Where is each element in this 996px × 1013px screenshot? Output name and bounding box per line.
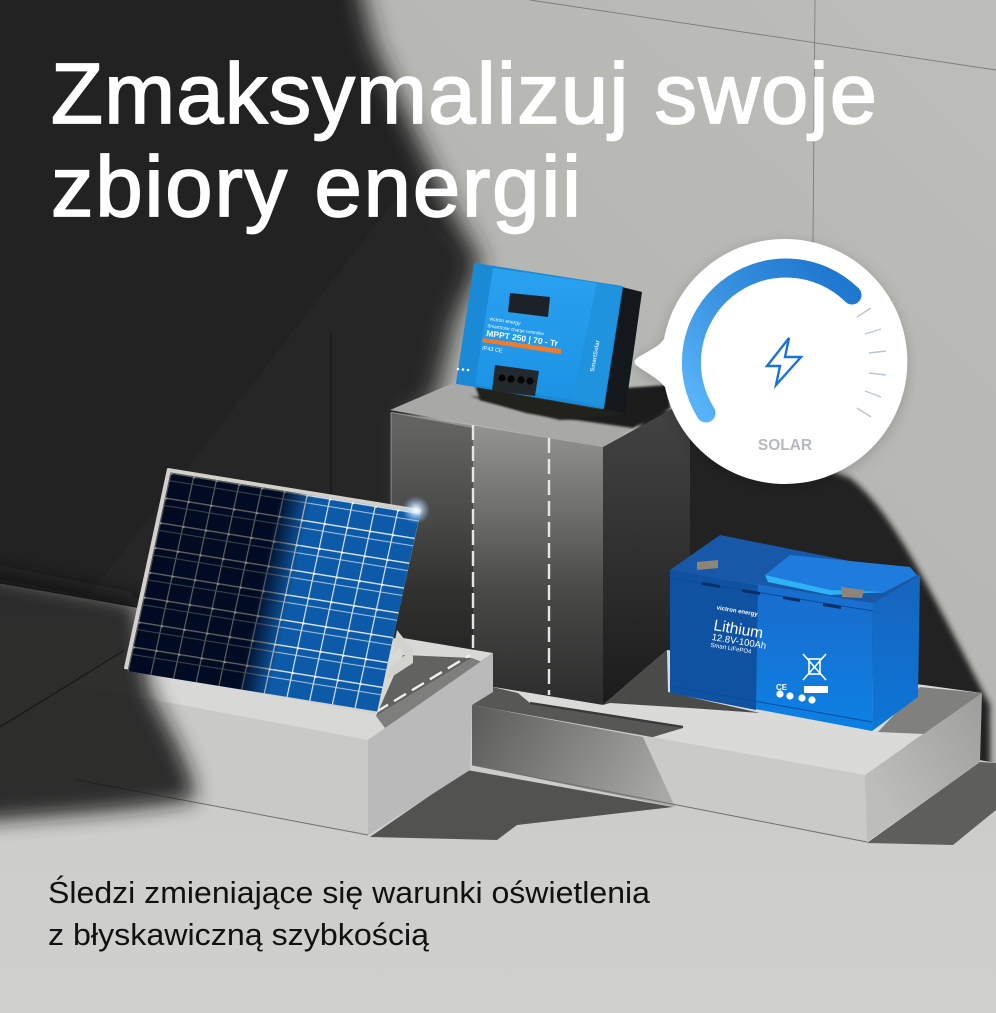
battery rim (670, 578, 873, 722)
recycling icon (803, 654, 826, 680)
battery markings (776, 683, 828, 704)
title: zbiory energii (51, 140, 581, 235)
battery lid (765, 555, 917, 593)
battery side (872, 575, 920, 731)
plinth top (390, 380, 633, 447)
solar panel (125, 469, 430, 713)
right plinth front (472, 705, 867, 842)
panel glint (402, 496, 430, 524)
controller body (457, 264, 622, 408)
plinth top shade (470, 385, 670, 428)
icon: lightning bolt (767, 338, 801, 385)
left plinth (74, 638, 493, 835)
battery labels: Lithium (712, 617, 764, 642)
left plinth side (368, 653, 493, 835)
plinth side (603, 400, 690, 705)
wall shadow: behind battery (640, 400, 990, 790)
controller labels: IP43 CE (482, 346, 503, 355)
controller right edge (573, 283, 622, 408)
right plinth (472, 650, 982, 842)
battery shaded front (670, 570, 758, 710)
controller labels: MPPT 250 | 70 - Tr (486, 328, 559, 349)
big soft shadow: lower left (0, 560, 195, 825)
orange stripe (482, 338, 561, 354)
callout bubble (634, 239, 907, 484)
centre plinth (390, 380, 690, 705)
battery top (670, 535, 920, 603)
right plinth top (472, 650, 982, 775)
controller port cover (508, 293, 550, 317)
gauge label: SOLAR (758, 437, 812, 454)
controller side label: SmartSolar (590, 339, 602, 372)
gauge arc (691, 268, 852, 413)
battery front (670, 570, 873, 731)
panel stand (387, 630, 413, 680)
battery terminals (697, 560, 864, 598)
plinth front (391, 412, 603, 705)
shadow below controller (475, 385, 620, 420)
wall shadow: left (0, 0, 482, 640)
gauge ticks (857, 308, 886, 417)
title (51, 47, 877, 235)
floor (0, 583, 996, 1013)
mounting plate (600, 287, 642, 413)
left plinth shade (376, 655, 472, 716)
battery markings: CE (776, 683, 788, 692)
floor seams (0, 583, 137, 727)
light gaps on plinth (473, 425, 549, 695)
controller face (475, 268, 597, 400)
controller labels: SmartSolar charge controller (487, 323, 545, 336)
battery labels: victron energy (716, 605, 759, 618)
battery notches (702, 582, 841, 609)
title: Zmaksymalizuj swoje (51, 47, 877, 142)
gauge callout (634, 239, 907, 484)
subtitle: Śledzi zmieniające się warunki oświetlenia (48, 874, 651, 910)
battery (670, 535, 920, 731)
panel cells (128, 472, 420, 712)
terminal block (492, 365, 539, 396)
panel frame (125, 469, 420, 713)
subtitle: z błyskawiczną szybkością (48, 917, 430, 952)
battery labels (710, 605, 771, 658)
controller labels (482, 316, 561, 362)
left plinth top (74, 638, 493, 740)
plinth front shade (392, 413, 473, 685)
floor shadow: right (867, 762, 996, 845)
right plinth side (865, 693, 982, 842)
battery labels: 12.8V-100Ah (711, 632, 767, 652)
floor shadow: centre (370, 770, 673, 840)
subtitle (48, 874, 651, 952)
wall seam (330, 332, 332, 590)
right plinth top shade (472, 687, 683, 740)
charge controller (457, 264, 642, 420)
controller labels: victron energy (489, 316, 521, 327)
left plinth front (74, 685, 368, 835)
status LEDs (457, 368, 469, 371)
battery labels: Smart LiFePO4 (710, 643, 752, 656)
